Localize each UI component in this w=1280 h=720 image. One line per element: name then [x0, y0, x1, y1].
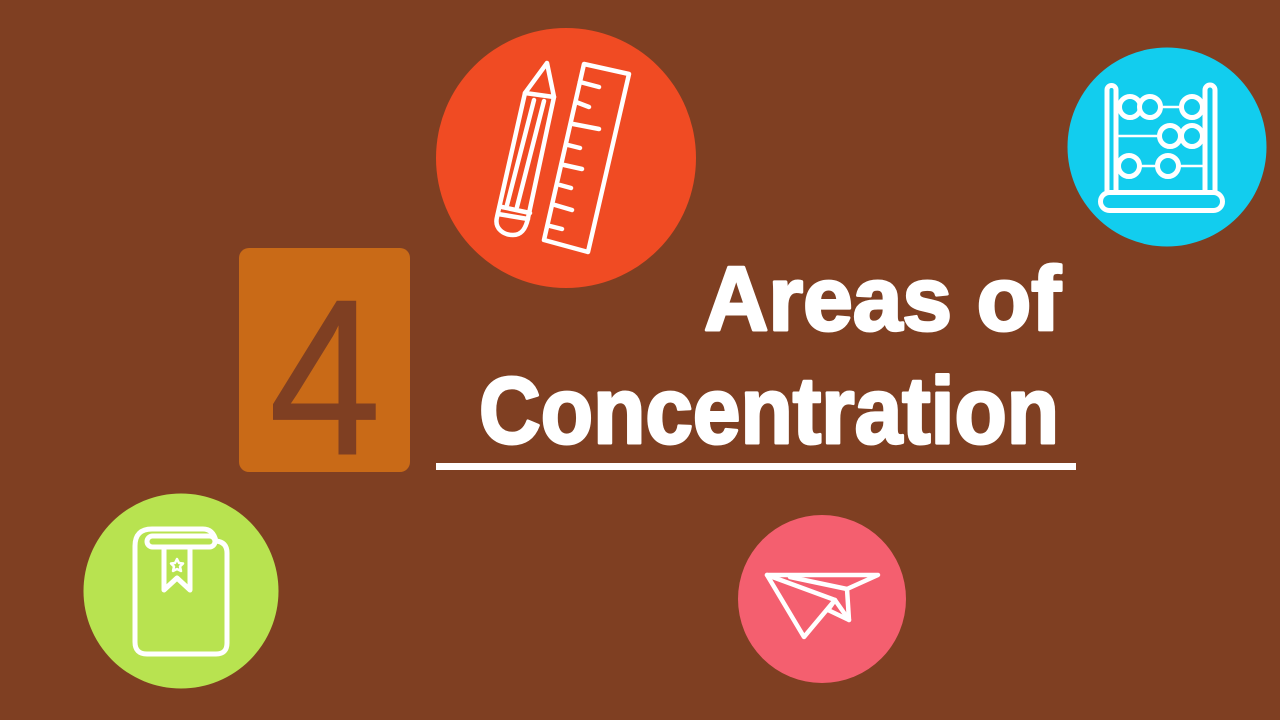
- icon: bookmarked book in green circle: [84, 494, 278, 688]
- title underline: [436, 463, 1076, 470]
- title: [479, 249, 1062, 464]
- icon: abacus in cyan circle: [1068, 48, 1266, 246]
- title: Areas of: [704, 249, 1062, 350]
- number card: 4: 4: [269, 253, 381, 501]
- title: Concentration: [479, 358, 1059, 464]
- number card: 4: [239, 248, 410, 501]
- icon: pencil and ruler in orange circle: [436, 28, 696, 288]
- icon: paper plane in pink circle: [738, 515, 906, 683]
